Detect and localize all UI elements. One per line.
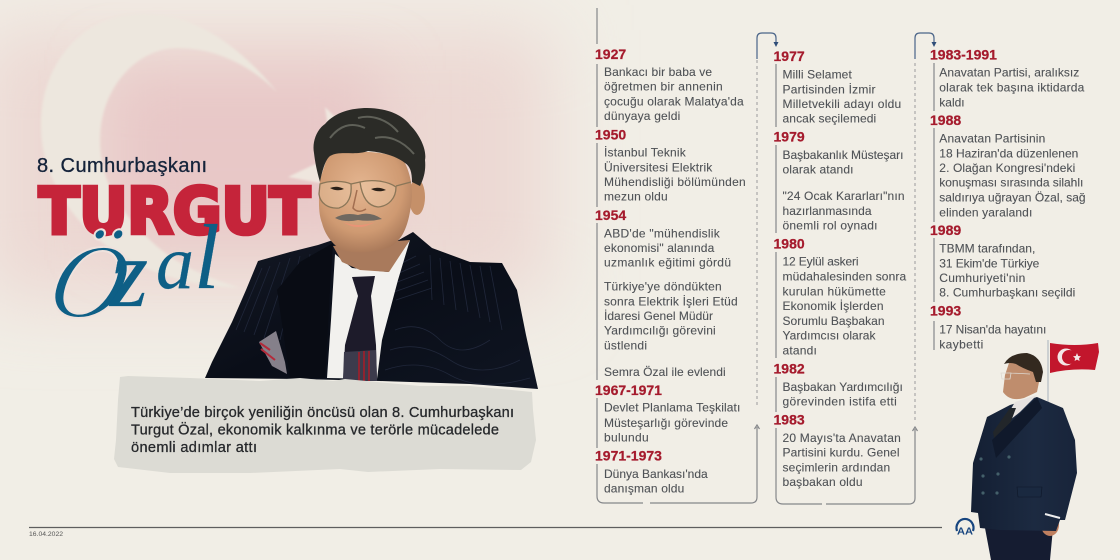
entry: 1954: Semra Özal ile evlendi [604,365,726,379]
entry: 1927: dünyaya geldi [604,109,680,123]
mouth [343,222,375,227]
entry: 1954: ekonomisi" alanında [604,241,715,255]
entry: 1977: Milli Selamet [782,67,852,81]
tie [343,276,377,381]
heading: Özal script: l [194,206,220,308]
torn paper caption [114,376,536,473]
date: 16.04.2022 [29,531,63,538]
entry: 1993: 17 Nisan'da hayatını [939,322,1046,336]
nose [353,190,366,211]
buttons [979,455,1011,495]
entry: 1980: Sorumlu Başbakan [782,314,884,328]
entry: 1950: 1950 [595,126,626,142]
standing figure of Özal [971,353,1077,560]
hair highlights [330,117,414,154]
entry: 1954: üstlendi [604,338,647,352]
entry: 1977: 1977 [774,48,805,64]
face [319,152,412,252]
entry: 1954: uzmanlık eğitimi gördü [604,256,731,270]
entry: 1954 [595,207,738,380]
entry: 1950: İstanbul Teknik [604,146,687,160]
entry: 1980: müdahalesinden sonra [782,270,907,284]
entry: 1982: Başbakan Yardımcılığı [782,380,903,394]
entry: 1950: mezun oldu [604,190,668,204]
entry: 1954: İdaresi Genel Müdür [604,309,713,323]
eyes [330,187,386,191]
entry: 1954: sonra Elektrik İşleri Etüd [604,294,738,308]
entry: 1979: önemli rol oynadı [782,219,878,233]
entry: 1979 [774,129,904,233]
heading: Özal script: z [108,220,148,328]
entry: 1967-1971: Devlet Planlama Teşkilatı [604,401,740,415]
entry: 1988: 1988 [930,112,961,128]
entry: 1983-1991: olarak tek başına iktidarda [939,81,1085,95]
entry: 1977 [774,48,901,127]
entry: 1988: saldırıya uğrayan Özal, sağ [939,191,1086,205]
connector arrow to column 3 [776,33,936,504]
moustache [335,214,382,221]
pocket flap [1017,487,1042,497]
entry: 1983 [774,411,901,489]
hand [1041,514,1059,536]
shirt [327,240,410,379]
entry: 1927: 1927 [595,46,626,62]
heading: 8. Cumhurbaşkanı: 8. Cumhurbaşkanı [37,155,207,177]
entry: 1979: olarak atandı [782,163,854,177]
entry: 1989: Cumhuriyeti'nin [939,271,1025,285]
entry: 1989: 8. Cumhurbaşkanı seçildi [939,286,1075,300]
entry: 1971-1973: 1971-1973 [595,448,662,464]
heading: TURGUT: TURGUT [39,175,310,248]
entry: 1979: Başbakanlık Müsteşarı [782,148,904,162]
entry: 1950: Üniversitesi Elektrik [604,160,713,174]
glasses [319,181,411,208]
entry: 1967-1971: bulundu [604,431,649,445]
entry: 1983-1991: 1983-1991 [930,46,997,62]
entry: 1927: öğretmen bir annenin [604,80,723,94]
heading: Özal script: Ö [39,223,141,341]
cuff [1045,514,1060,518]
entry: 1983-1991: Anavatan Partisi, aralıksız [939,66,1079,80]
entry: 1988: elinden yaralandı [939,205,1032,219]
entry: 1954: Türkiye'ye döndükten [604,280,722,294]
entry: 1980: Yardımcısı olarak [782,329,876,343]
entry: 1993: 1993 [930,303,961,319]
entry: 1971-1973 [595,448,708,496]
entry: 1977: ancak seçilemedi [782,112,876,126]
entry: 1988: 18 Haziran'da düzenlenen [939,146,1078,160]
caption text: Türkiye’de birçok yeniliğin öncüsü olan 8. Cumhurbaşkanı [131,405,514,421]
entry: 1971-1973: danışman oldu [604,482,684,496]
caption text: önemli adımlar attı [131,440,257,456]
entry: 1989 [930,222,1075,302]
entry: 1988 [930,112,1086,222]
entry: 1954: ABD'de "mühendislik [604,226,721,240]
entry: 1980: Ekonomik İşlerden [782,299,884,313]
entry: 1989: TBMM tarafından, [939,242,1035,256]
portrait: Turgut Özal [205,108,538,389]
entry: 1983: seçimlerin ardından [782,460,890,474]
entry: 1983: başbakan oldu [782,475,862,489]
entry: 1977: Milletvekili adayı oldu [782,97,901,111]
entry: 1927 [595,46,744,127]
entry: 1927: çocuğu olarak Malatya'da [604,94,744,108]
entry: 1954: Yardımcılığı görevini [604,324,716,338]
entry: 1982: görevinden istifa etti [782,395,897,409]
entry: 1993: kaybetti [939,337,983,351]
entry: 1988: konuşması sırasında silahlı [939,176,1083,190]
connector arrow to column 2 [597,33,778,503]
caption text [131,405,514,456]
heading: Özal script [39,206,220,341]
hair [1004,353,1043,382]
lapel shadow [277,243,333,378]
hair [313,108,425,186]
AA logo: AA [957,526,973,538]
shirt and tie [1000,395,1037,428]
head [1003,360,1041,399]
entry: 1927: Bankacı bir baba ve [604,65,712,79]
entry: 1983: Partisini kurdu. Genel [782,446,900,460]
start line [596,8,598,44]
entry: 1979: 1979 [774,129,805,145]
entry: 1979: "24 Ocak Kararları"nın [782,189,904,203]
entry: 1980: 1980 [774,235,805,251]
entry: 1983: 1983 [774,411,805,427]
entry: 1967-1971 [595,382,740,448]
entry: 1954: 1954 [595,207,626,223]
entry: 1967-1971: 1967-1971 [595,382,662,398]
jacket [205,232,538,389]
entry: 1980 [774,235,907,358]
Turkish flag on pole [1048,340,1099,402]
entry: 1988: 2. Olağan Kongresi'ndeki [939,161,1075,175]
entry: 1980: kurulan hükümette [782,284,886,298]
entry: 1989: 31 Ekim'de Türkiye [939,256,1040,270]
neck [333,240,410,272]
jacket [971,397,1077,531]
entry: 1977: Partisinden İzmir [782,82,876,96]
entry: 1988: Anavatan Partisinin [939,131,1045,145]
timeline column 2 [774,33,936,504]
timeline column 3 [930,46,1086,351]
entry: 1971-1973: Dünya Bankası'nda [604,467,708,481]
entry: 1993 [930,303,1046,351]
entry: 1979: hazırlanmasında [782,204,872,218]
entry: 1982: 1982 [774,360,805,376]
glasses [1001,373,1030,379]
entry: 1983-1991: kaldı [939,95,965,109]
pocket square [259,331,287,374]
background: faded Turkish flag [0,14,550,300]
entry: 1983-1991 [930,46,1085,111]
entry: 1983: 20 Mayıs'ta Anavatan [782,431,901,445]
entry: 1967-1971: Müsteşarlığı görevinde [604,416,728,430]
caption text: Turgut Özal, ekonomik kalkınma ve terörle mücadelede [131,420,499,438]
entry: 1950 [595,126,746,207]
footer line [29,526,942,528]
ear [409,179,425,215]
AA logo [956,519,973,538]
entry: 1950: Mühendisliği bölümünden [604,175,746,189]
timeline column 1 [595,8,778,503]
entry: 1982 [774,360,903,412]
entry: 1980: 12 Eylül askeri [782,255,858,269]
entry: 1989: 1989 [930,222,961,238]
jacket stripes [236,254,530,384]
trousers [985,528,1053,560]
entry: 1980: atandı [782,343,817,357]
paper shape [114,376,536,473]
heading: Özal script: a [156,221,194,305]
